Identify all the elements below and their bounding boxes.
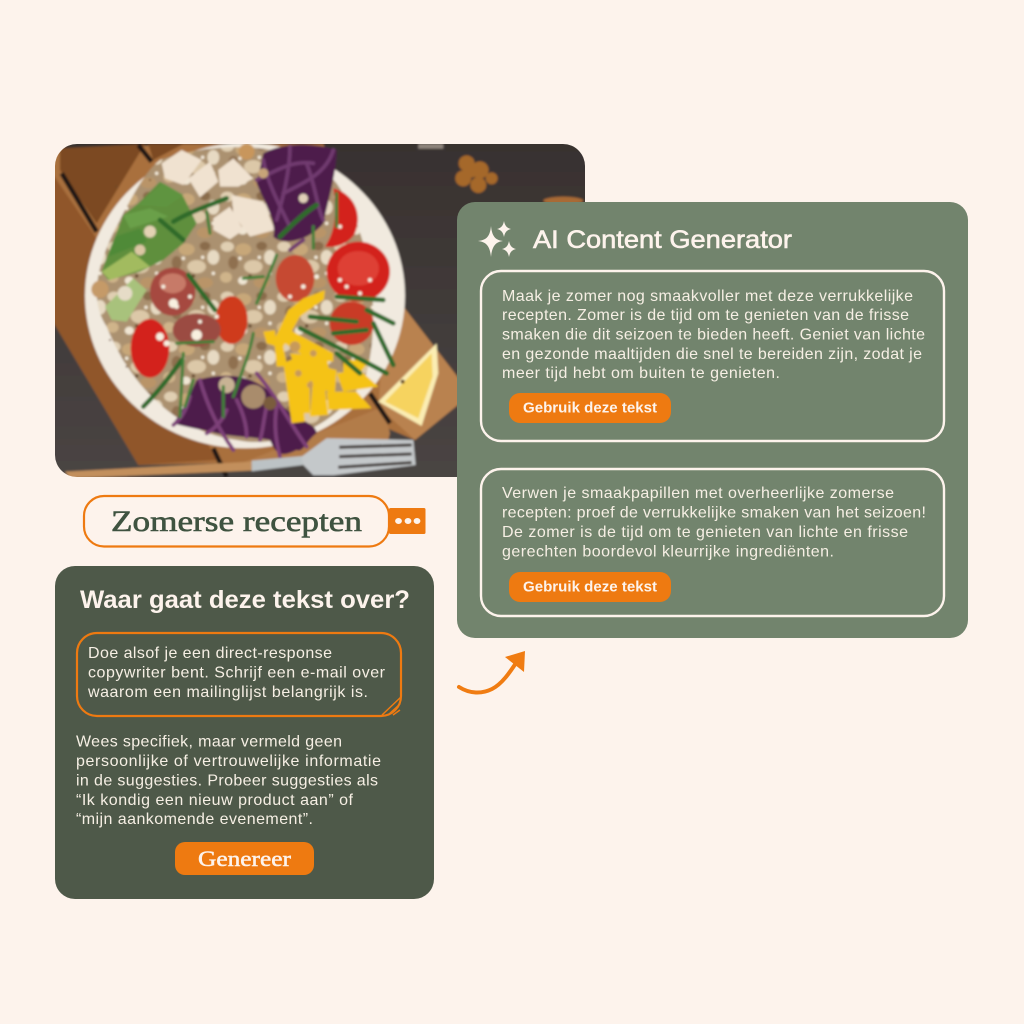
card: second suggestion: Verwen je smaakpapillen met overheerlijke zomerse bbox=[502, 485, 894, 502]
prompt text box bbox=[77, 633, 401, 716]
card: first suggestion: Maak je zomer nog smaakvoller met deze verrukkelijke bbox=[502, 288, 913, 305]
instructions text: persoonlijke of vertrouwelijke informatie bbox=[76, 753, 381, 770]
icon: sparkles bbox=[478, 221, 516, 257]
card: first suggestion bbox=[481, 271, 944, 441]
button: use this text bbox=[509, 572, 671, 602]
card: first suggestion: meer tijd hebt om buiten te genieten. bbox=[502, 365, 780, 382]
panel: Waar gaat deze tekst over bbox=[55, 566, 434, 899]
input pill: Zomerse recepten: Zomerse recepten bbox=[111, 505, 362, 538]
panel: AI Content Generator bbox=[457, 202, 968, 638]
tomatoes bbox=[131, 188, 390, 378]
card: first suggestion: smaken die dit seizoen te bieden heeft. Geniet van lichte bbox=[502, 326, 925, 344]
scallions bbox=[143, 198, 393, 407]
grain mound bbox=[97, 147, 373, 442]
button: Genereer bbox=[175, 842, 314, 875]
plate bbox=[85, 143, 405, 448]
card: second suggestion: gerechten boordevol kleurrijke ingrediënten. bbox=[502, 544, 834, 560]
input pill: Zomerse recepten bbox=[84, 496, 426, 546]
button: use this text: Gebruik deze tekst bbox=[523, 400, 657, 416]
heading: Waar gaat deze tekst over: Waar gaat deze tekst over? bbox=[80, 586, 410, 614]
arrow bbox=[459, 651, 525, 693]
card: second suggestion: De zomer is de tijd om te genieten van lichte en frisse bbox=[502, 524, 908, 541]
seeds and chunks on tomatoes bbox=[156, 225, 372, 346]
instructions text: “Ik kondig een nieuw product aan” of bbox=[76, 792, 354, 809]
button: Genereer: Genereer bbox=[198, 846, 292, 871]
button: use this text bbox=[509, 393, 671, 423]
instructions text: “mijn aankomende evenement”. bbox=[76, 811, 313, 828]
lemon wedge bbox=[378, 343, 438, 426]
wood board bbox=[55, 144, 415, 466]
prompt text box: waarom een mailinglijst belangrijk is. bbox=[87, 684, 368, 701]
heading: AI Content Generator: AI Content Generator bbox=[533, 226, 792, 254]
prompt text box: copywriter bent. Schrijf een e-mail over bbox=[88, 664, 386, 682]
fork bbox=[65, 462, 252, 478]
cabbage bottom bbox=[173, 376, 317, 454]
card: first suggestion: en gezonde maaltijden die snel te bereiden zijn, zodat je bbox=[502, 346, 922, 363]
greens left bbox=[102, 182, 197, 280]
chicken bbox=[162, 144, 275, 239]
prompt text box: Doe alsof je een direct-response bbox=[88, 645, 332, 662]
instructions text: in de suggesties. Probeer suggesties als bbox=[76, 772, 378, 790]
photo: salad bowl on a wooden board bbox=[50, 140, 590, 483]
card: first suggestion: recepten. Zomer is de tijd om te genieten van de frisse bbox=[502, 307, 909, 324]
instructions text: Wees specifiek, maar vermeld geen bbox=[76, 734, 342, 750]
cabbage top bbox=[257, 145, 337, 241]
button: use this text: Gebruik deze tekst bbox=[523, 580, 657, 596]
instructions text bbox=[76, 734, 381, 828]
card: second suggestion bbox=[481, 469, 944, 616]
walnut bbox=[455, 155, 498, 193]
yellow pepper bbox=[263, 290, 378, 423]
card: second suggestion: recepten: proef de verrukkelijke smaken van het seizoen! bbox=[502, 504, 926, 522]
